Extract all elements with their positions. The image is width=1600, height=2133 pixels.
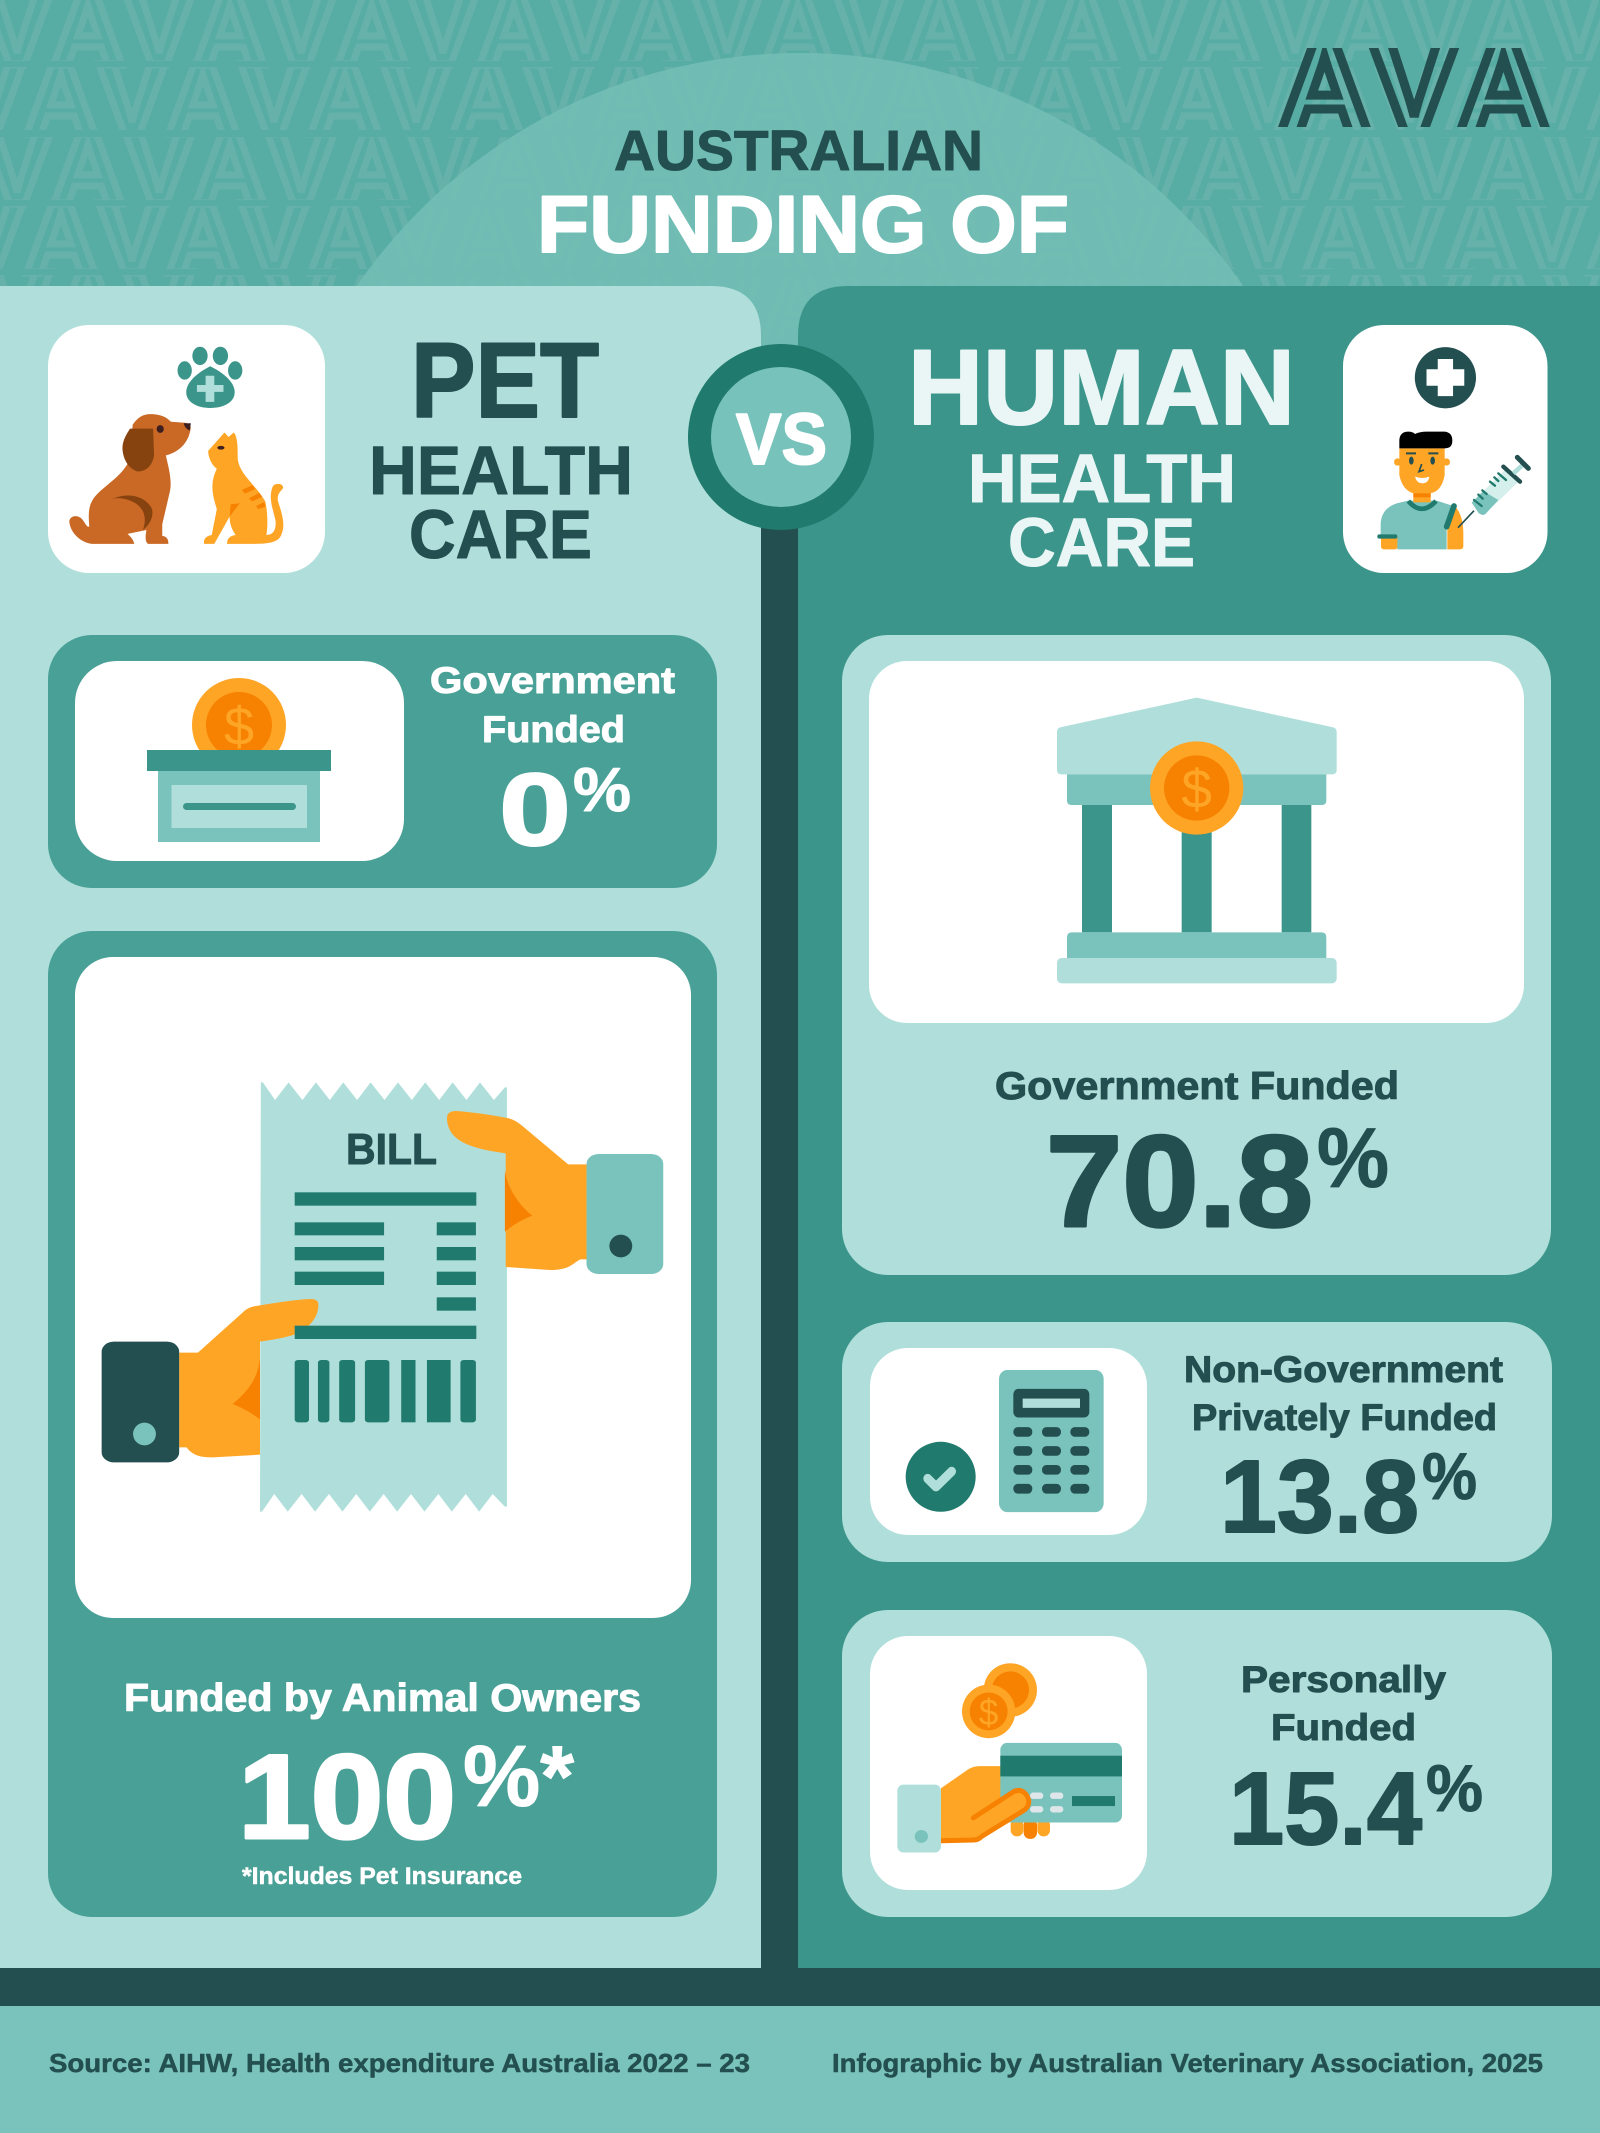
header arc [262,53,1338,1129]
label [430,660,675,750]
heading: pet health care: HEALTH [369,432,633,509]
credit text: Infographic by Australian Veterinary Association, 2025 [832,2048,1543,2078]
icon: hand with card and coins [897,1663,1122,1852]
icon: government building: $ [1181,758,1212,820]
icon: hand with card and coins: $ [979,1691,998,1733]
card: government funded 0% [48,635,717,888]
value: 0% [499,752,631,867]
label: Government Funded [995,1065,1399,1108]
vs badge: VS [736,400,827,480]
value: 100%*: 100 [238,1730,456,1864]
footnote: *Includes Pet Insurance [242,1863,522,1890]
heading: human health care: HUMAN [908,327,1295,447]
heading: human health care: HEALTH [968,440,1236,517]
value: 70.8%: 70.8 [1046,1108,1313,1254]
heading: pet health care [369,320,633,573]
title [537,119,1069,270]
value: 0%: 0 [499,752,571,867]
human icon card [1343,325,1548,573]
icon: coin box [147,678,331,842]
label: Privately Funded [1192,1397,1497,1438]
value: 13.8%: % [1422,1439,1477,1513]
panel: pet health care [0,286,761,1968]
vs badge [688,344,874,530]
icon: person with syringe [1377,432,1528,549]
icon: cat [204,432,283,544]
value: 100%* [238,1729,575,1864]
label [1241,1659,1446,1748]
card: non-government privately funded 13.8% [842,1322,1552,1562]
icon: paw with cross [178,347,242,408]
heading: human health care: CARE [1008,504,1195,581]
bill label: BILL [346,1125,437,1174]
icon: coin box: $ [224,697,254,757]
title: FUNDING OF [537,180,1069,270]
icon: medical cross badge [1415,347,1476,408]
source text: Source: AIHW, Health expenditure Australia 2022 – 23 [49,2048,750,2078]
icon: calculator and check [906,1370,1104,1512]
icon: dog [69,414,191,544]
pet icon card [48,325,325,573]
value: 15.4%: 15.4 [1229,1751,1422,1866]
value: 13.8%: 13.8 [1220,1439,1419,1554]
card: government funded 70.8% [842,635,1551,1275]
panel: human health care [798,286,1600,1968]
heading: pet health care: CARE [409,496,592,573]
label: Personally [1241,1659,1446,1700]
label: Government [430,660,675,701]
label: Non-Government [1184,1349,1503,1390]
bottom band [0,1968,1600,2006]
icon: government building [1057,698,1337,983]
value: 100%*: %* [463,1729,575,1825]
label: Funded [482,709,625,750]
label: Funded by Animal Owners [124,1677,641,1720]
value: 0%: % [573,756,631,825]
logo: AVA: AVA [1278,16,1550,160]
label [1184,1349,1503,1438]
title: AUSTRALIAN [614,119,983,183]
card: personally funded 15.4% [842,1610,1552,1917]
card: funded by animal owners 100% [48,931,717,1917]
value: 70.8%: % [1317,1111,1389,1205]
heading: human health care [908,327,1295,581]
value: 15.4%: % [1426,1751,1483,1825]
heading: pet health care: PET [411,320,599,440]
footer [0,2006,1600,2133]
label: Funded [1271,1707,1416,1748]
center divider [755,400,805,1970]
icon: bill with two hands [102,1082,663,1512]
